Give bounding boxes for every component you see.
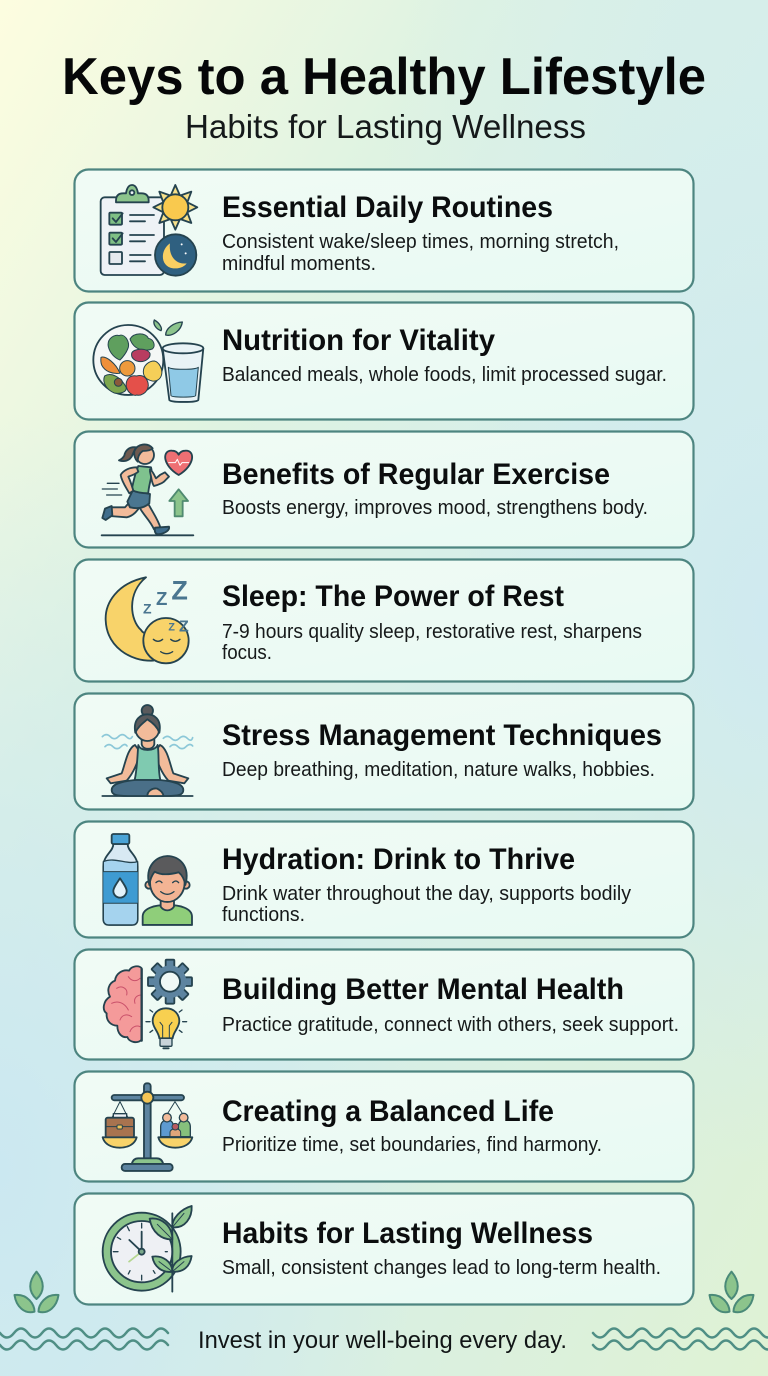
icon: clock with growing plant (103, 1206, 192, 1292)
description: Deep breathing, meditation, nature walks, hobbies. (222, 758, 655, 781)
icon: crescent moon and sleeping face: Z (156, 588, 167, 609)
right plant decoration (710, 1272, 753, 1312)
description: focus. (222, 641, 272, 664)
panel: lasting wellness (74, 1194, 694, 1304)
footer tagline: Invest in your well-being every day. (198, 1327, 567, 1354)
panel: nutrition for vitality (74, 302, 694, 420)
icon: plate of food and water glass (93, 320, 203, 402)
description: Boosts energy, improves mood, strengthens body. (222, 496, 648, 519)
heading: Habits for Lasting Wellness (222, 1217, 593, 1250)
title: Keys to a Healthy Lifestyle (62, 48, 706, 106)
description: functions. (222, 903, 305, 926)
description: mindful moments. (222, 252, 376, 275)
description: Small, consistent changes lead to long-term health. (222, 1256, 661, 1279)
left plant decoration (15, 1272, 58, 1312)
panel: stress management (74, 694, 694, 810)
panel: hydration (74, 822, 694, 938)
icon: crescent moon and sleeping face: Z (179, 618, 189, 635)
subtitle: Habits for Lasting Wellness (185, 108, 586, 145)
icon: crescent moon and sleeping face (106, 575, 189, 663)
description: Practice gratitude, connect with others, seek support. (222, 1013, 679, 1036)
heading: Creating a Balanced Life (222, 1095, 554, 1128)
panel: sleep (74, 560, 694, 682)
icon: crescent moon and sleeping face: Z (143, 600, 152, 616)
right wave decoration (593, 1328, 768, 1350)
icon: checklist with sun and moon (101, 185, 197, 276)
panel: mental health (74, 950, 694, 1060)
panel: balanced life (74, 1072, 694, 1182)
icon: meditating figure (102, 705, 193, 796)
heading: Hydration: Drink to Thrive (222, 843, 575, 876)
icon: crescent moon and sleeping face: Z (168, 622, 175, 634)
description: 7-9 hours quality sleep, restorative rest, sharpens (222, 620, 642, 643)
icon: runner with heart and arrow (102, 444, 193, 535)
icon: balance scale with briefcase and family (103, 1083, 192, 1171)
heading: Benefits of Regular Exercise (222, 458, 610, 491)
heading: Nutrition for Vitality (222, 324, 496, 357)
icon: crescent moon and sleeping face: Z (171, 575, 188, 605)
heading: Essential Daily Routines (222, 191, 553, 224)
description: Prioritize time, set boundaries, find harmony. (222, 1133, 602, 1156)
description: Balanced meals, whole foods, limit processed sugar. (222, 363, 667, 386)
description: Drink water throughout the day, supports bodily (222, 882, 632, 905)
icon: water bottle and smiling person (103, 834, 192, 925)
heading: Building Better Mental Health (222, 973, 624, 1006)
left wave decoration (0, 1328, 168, 1350)
icon: brain, gear and light bulb (104, 960, 192, 1048)
heading: Stress Management Techniques (222, 719, 662, 752)
heading: Sleep: The Power of Rest (222, 580, 564, 613)
panel: essential daily routines (74, 170, 694, 292)
panel: benefits of regular exercise (74, 432, 694, 548)
description: Consistent wake/sleep times, morning stretch, (222, 230, 619, 253)
